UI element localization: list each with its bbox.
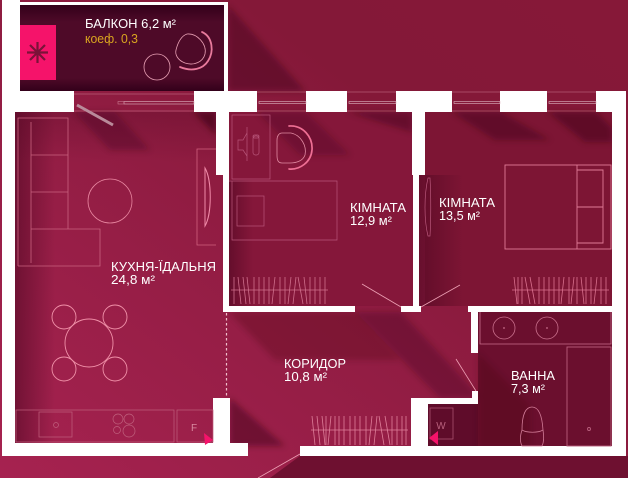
label: coefficient: коеф. 0,3 <box>85 31 138 46</box>
label: balcony: БАЛКОН 6,2 м² <box>85 16 177 31</box>
icon: washer arrow <box>429 431 438 445</box>
label: room 12.9: 12,9 м² <box>350 213 393 228</box>
wardrobe: room 13.5 <box>512 277 609 304</box>
room chair <box>277 126 312 169</box>
toilet <box>520 407 544 446</box>
room desk <box>229 115 337 240</box>
shower <box>567 347 611 446</box>
label: corridor: 10,8 м² <box>284 369 328 384</box>
label: corridor: КОРИДОР <box>284 356 346 371</box>
wardrobe: corridor <box>311 416 408 445</box>
label: bathroom: 7,3 м² <box>511 381 546 396</box>
room 13.5 TV <box>425 178 431 236</box>
door swings <box>258 284 476 478</box>
kitchen left cabinets <box>18 118 100 266</box>
diagonal wall shadows <box>74 5 612 446</box>
dining table <box>52 305 127 381</box>
balcony door leaf <box>77 105 113 125</box>
balcony furniture <box>144 32 212 80</box>
label: kitchen-dining: 24,8 м² <box>111 272 156 287</box>
washer <box>430 408 453 439</box>
washer: W <box>436 421 446 432</box>
bed <box>505 165 611 249</box>
bathroom vanity <box>480 312 611 344</box>
label: kitchen-dining: КУХНЯ-ЇДАЛЬНЯ <box>111 259 216 274</box>
icon: fridge arrow <box>204 433 213 445</box>
living TV unit <box>197 149 216 245</box>
balcony floor <box>20 5 224 91</box>
round table <box>88 179 132 223</box>
dashed kitchen boundary <box>226 313 228 397</box>
fridge label: F <box>191 423 197 434</box>
band below the plan <box>270 456 628 478</box>
room shading <box>15 112 612 446</box>
label: room 12.9: КІМНАТА <box>350 200 406 215</box>
label: bathroom: ВАННА <box>511 368 555 383</box>
label: room 13.5: 13,5 м² <box>439 208 481 223</box>
kitchen counter <box>16 410 213 442</box>
icon: asterisk tag <box>20 25 56 80</box>
label: room 13.5: КІМНАТА <box>439 195 495 210</box>
wardrobe: room 12.9 <box>231 277 328 304</box>
windows <box>74 92 596 111</box>
